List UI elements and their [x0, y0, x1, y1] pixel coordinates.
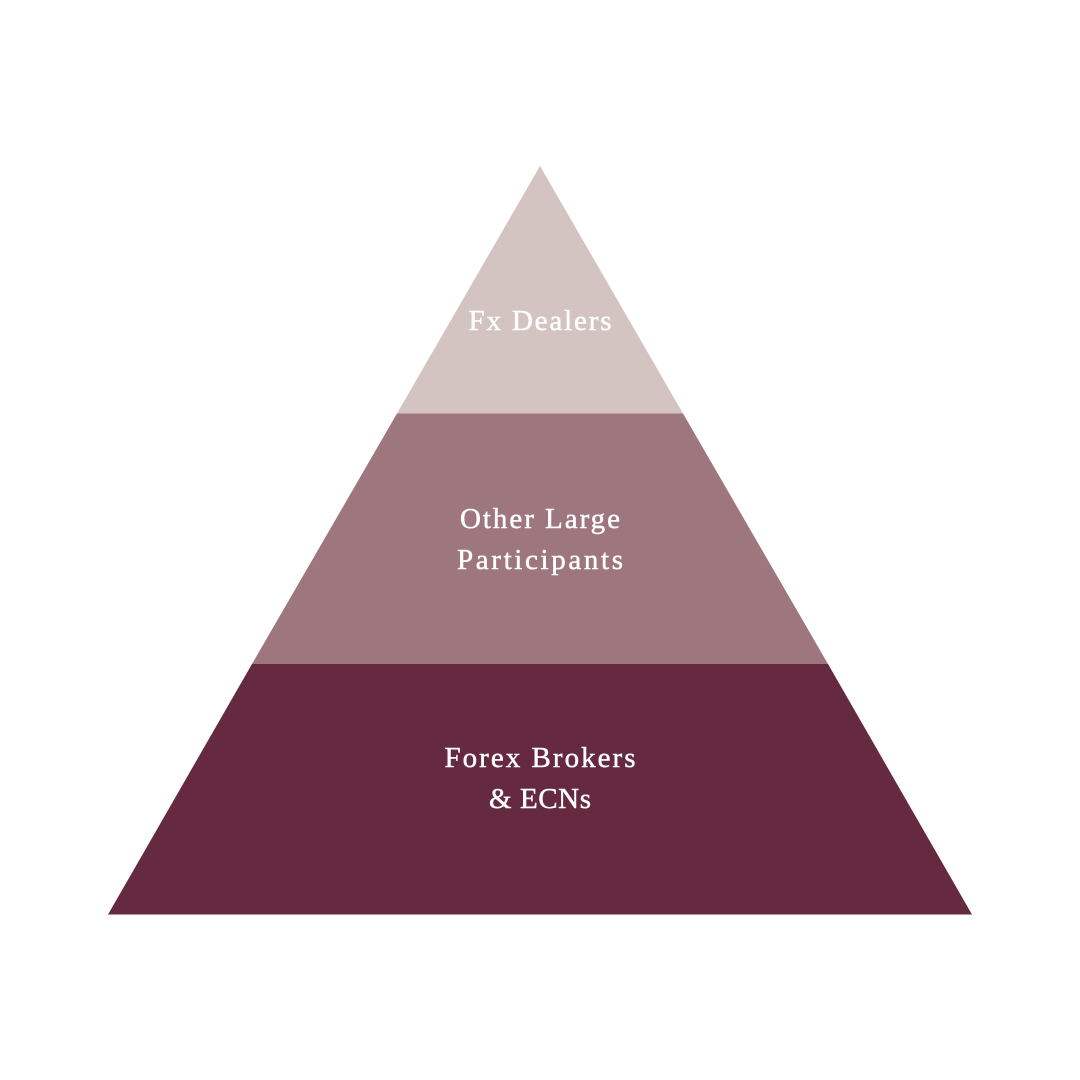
- pyramid tier: Other Large Participants: [252, 414, 828, 664]
- pyramid tier: Fx Dealers: Fx Dealers: [468, 305, 612, 337]
- pyramid tier: Other Large Participants: Other Large: [460, 503, 620, 535]
- pyramid tier: Forex Brokers & ECNs: [108, 664, 972, 914]
- pyramid tier: Forex Brokers & ECNs: Forex Brokers: [444, 742, 636, 774]
- pyramid tier: Fx Dealers: [397, 166, 683, 414]
- pyramid tier: Forex Brokers & ECNs: & ECNs: [489, 783, 591, 815]
- pyramid tier: Other Large Participants: Participants: [457, 544, 623, 576]
